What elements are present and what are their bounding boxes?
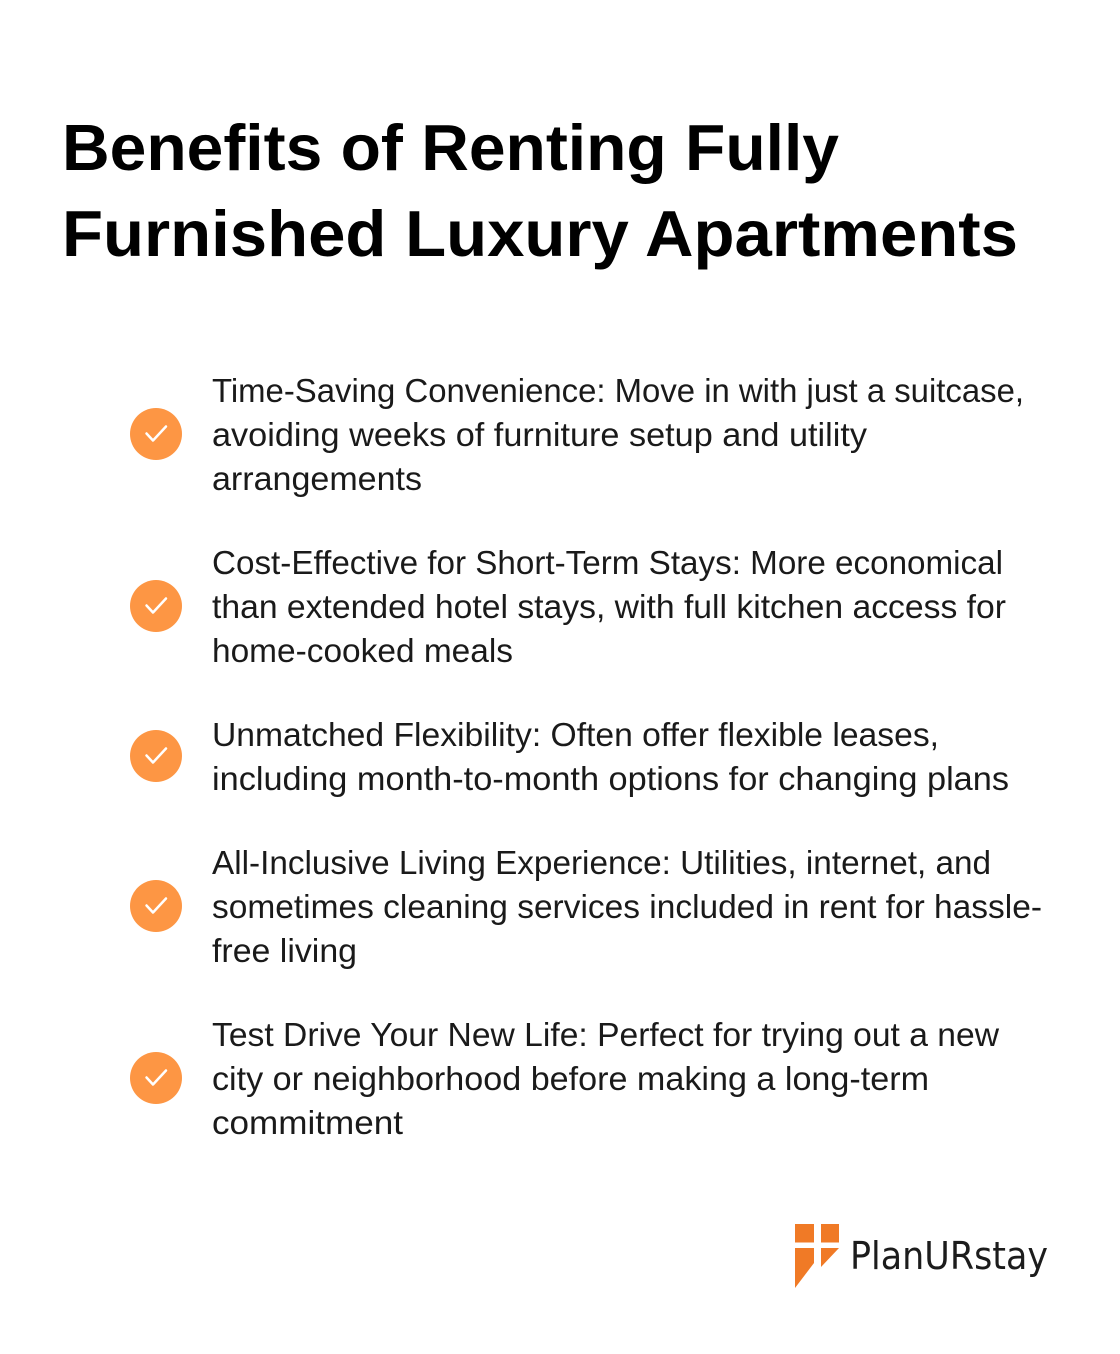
- title: [62, 111, 1018, 270]
- text: benefit 4: [212, 844, 1042, 969]
- logo wordmark: PlanURstay: [850, 1234, 1048, 1278]
- logo: PlanURstay: [795, 1224, 1048, 1288]
- text: benefit 1: arrangements: [212, 460, 422, 497]
- benefits list: [130, 372, 1042, 1141]
- text: benefit 1: [212, 372, 1024, 497]
- icon: logo mark: [795, 1224, 839, 1288]
- benefit 2: cost-effective for short-term stays: [130, 544, 1006, 669]
- icon: check badge 1: [130, 408, 182, 460]
- text: benefit 2: Cost-Effective for Short-Term Stays: More economical: [212, 544, 1003, 581]
- text: benefit 4: All-Inclusive Living Experience: Utilities, internet, and: [212, 844, 991, 881]
- benefit 3: unmatched flexibility: [130, 716, 1009, 797]
- text: benefit 3: [212, 716, 1009, 797]
- text: benefit 2: than extended hotel stays, with full kitchen access for: [212, 588, 1006, 625]
- icon: check badge 2: [130, 580, 182, 632]
- text: benefit 3: including month-to-month options for changing plans: [212, 760, 1009, 797]
- icon: check badge 4: [130, 880, 182, 932]
- text: benefit 4: free living: [212, 932, 357, 969]
- text: benefit 3: Unmatched Flexibility: Often offer flexible leases,: [212, 716, 939, 753]
- text: benefit 2: [212, 544, 1006, 669]
- text: benefit 1: avoiding weeks of furniture setup and utility: [212, 416, 868, 453]
- title: Benefits of Renting Fully: [62, 111, 839, 184]
- text: benefit 5: [212, 1016, 999, 1141]
- icon: check badge 5: [130, 1052, 182, 1104]
- text: benefit 1: Time-Saving Convenience: Move in with just a suitcase,: [212, 372, 1024, 409]
- text: benefit 5: commitment: [212, 1104, 403, 1141]
- title: Furnished Luxury Apartments: [62, 197, 1018, 270]
- text: benefit 4: sometimes cleaning services included in rent for hassle-: [212, 888, 1042, 925]
- benefit 4: all-inclusive living experience: [130, 844, 1042, 969]
- text: benefit 5: city or neighborhood before making a long-term: [212, 1060, 929, 1097]
- text: benefit 2: home-cooked meals: [212, 632, 513, 669]
- icon: check badge 3: [130, 730, 182, 782]
- benefit 5: test drive your new life: [130, 1016, 999, 1141]
- text: benefit 5: Test Drive Your New Life: Perfect for trying out a new: [212, 1016, 999, 1053]
- benefit 1: time-saving convenience: [130, 372, 1024, 497]
